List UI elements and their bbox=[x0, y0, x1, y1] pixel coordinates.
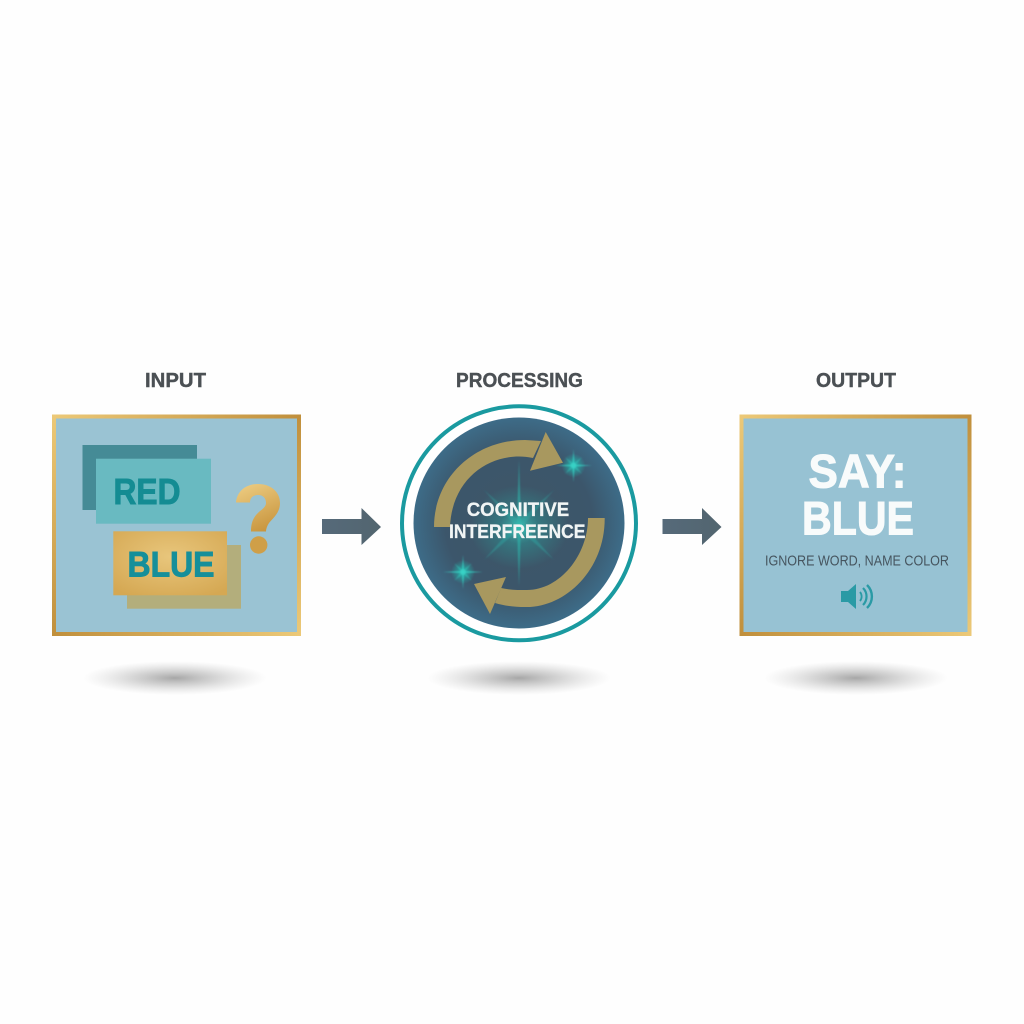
caption: IGNORE WORD, NAME COLOR bbox=[765, 554, 949, 570]
spark: lower left bbox=[443, 555, 483, 589]
icon: speaker bbox=[841, 584, 872, 609]
title: INPUT: INPUT bbox=[145, 370, 206, 392]
inner disc bbox=[414, 418, 624, 628]
spark: upper right bbox=[556, 449, 592, 482]
icon: question mark bbox=[236, 484, 280, 554]
panel: processing bbox=[402, 406, 636, 640]
heading: SAY: SAY: bbox=[808, 444, 906, 498]
card: RED back layer bbox=[82, 445, 197, 510]
word: RED: RED bbox=[114, 471, 180, 512]
arrow: bottom cycle bbox=[474, 518, 605, 614]
label: COGNITIVE INTERFREENCE: COGNITIVE bbox=[467, 500, 569, 521]
arrow: top cycle bbox=[434, 432, 563, 527]
central glow bbox=[469, 460, 569, 586]
label: COGNITIVE INTERFREENCE bbox=[449, 500, 586, 543]
card: BLUE back layer bbox=[127, 545, 241, 609]
word: BLUE: BLUE bbox=[128, 546, 214, 585]
arrow: processing to output bbox=[662, 508, 722, 545]
shadow: processing bbox=[427, 661, 611, 695]
shadow: input bbox=[83, 661, 267, 695]
card: BLUE front bbox=[113, 531, 227, 595]
shadow: output bbox=[764, 661, 948, 695]
panel: input bbox=[52, 414, 301, 636]
title: PROCESSING: PROCESSING bbox=[456, 370, 583, 392]
label: COGNITIVE INTERFREENCE: INTERFREENCE bbox=[449, 522, 586, 543]
arrow: input to processing bbox=[322, 508, 381, 545]
title: OUTPUT: OUTPUT bbox=[816, 370, 896, 392]
card: RED front bbox=[96, 459, 211, 524]
outer ring bbox=[402, 406, 636, 640]
panel: output bbox=[740, 414, 972, 636]
heading: BLUE: BLUE bbox=[802, 492, 914, 544]
